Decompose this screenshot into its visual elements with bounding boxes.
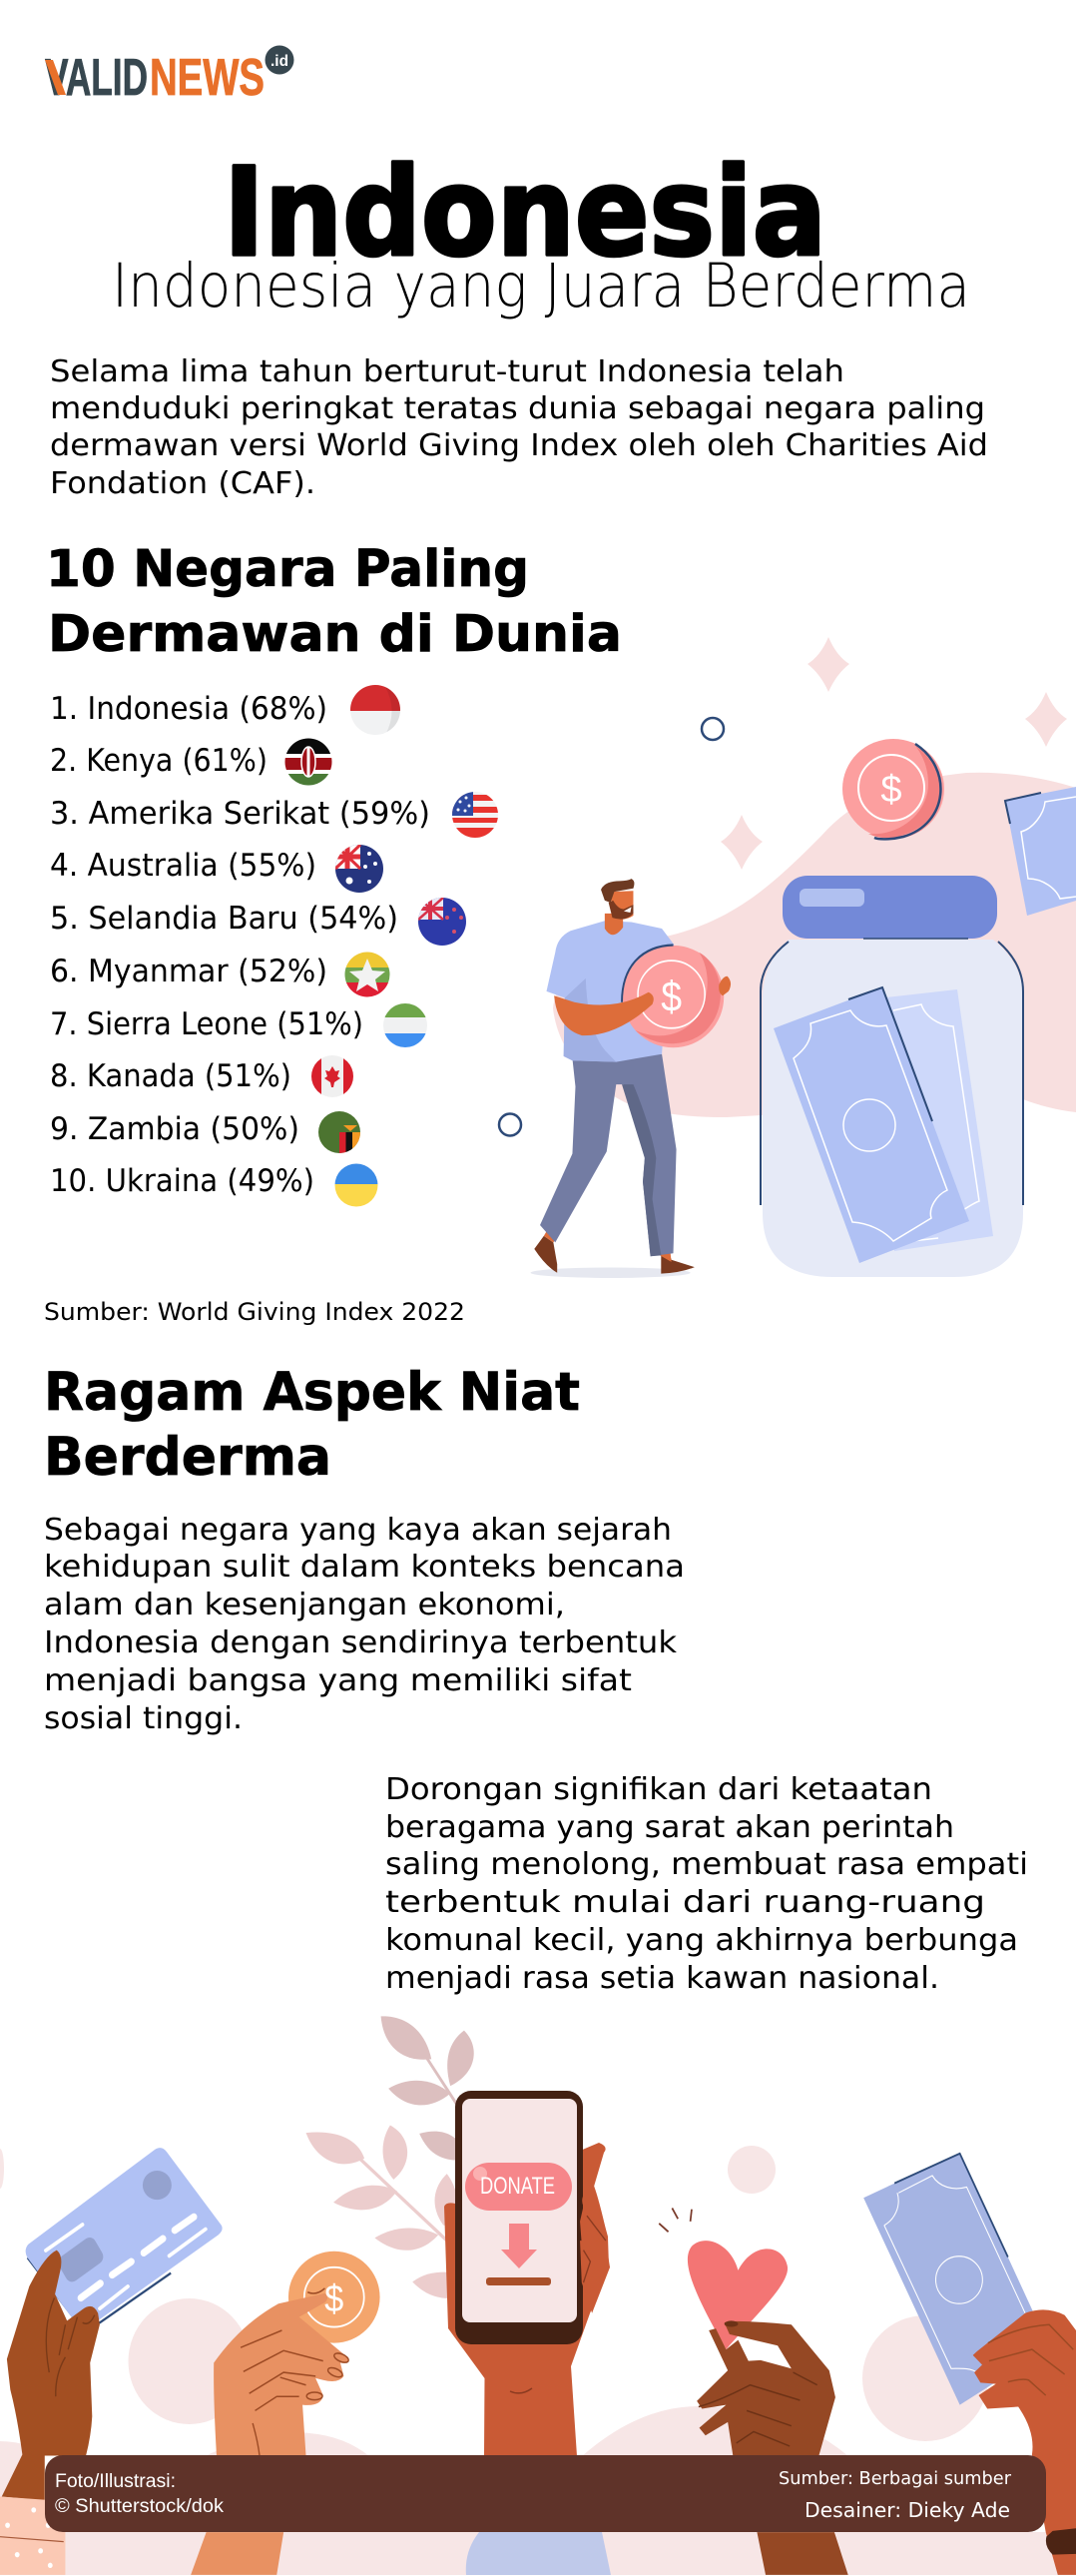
paragraph: right: beragama yang sarat akan perintah — [385, 1810, 954, 1845]
paragraph: right: komunal kecil, yang akhirnya berbunga — [385, 1923, 1018, 1958]
pink blob background — [553, 773, 1076, 1117]
country list: 2. Kenya (61%) — [50, 743, 268, 779]
pale background shapes — [0, 2146, 1076, 2575]
intro paragraph: Selama lima tahun berturut-turut Indonesia telah — [50, 354, 844, 389]
paragraph: right — [385, 1772, 1028, 1996]
donate button: DONATE — [480, 2173, 555, 2200]
flag: Zambia — [317, 1110, 361, 1154]
heading: 10 negara: Dermawan di Dunia — [48, 605, 622, 664]
country list: 1. Indonesia (68%) — [50, 691, 327, 727]
country list: 9. Zambia (50%) — [50, 1111, 299, 1147]
country list — [50, 691, 430, 1199]
leaves — [306, 2016, 474, 2298]
paragraph: right: terbentuk mulai dari ruang-ruang — [385, 1885, 985, 1920]
footer credits bar — [45, 2455, 1046, 2532]
man: $ — [661, 973, 682, 1020]
illustration: donating hands — [0, 2016, 1076, 2575]
dark hand holding card — [2, 2251, 100, 2500]
paragraph: left: alam dan kesenjangan ekonomi, — [44, 1588, 565, 1622]
paragraph: left: Sebagai negara yang kaya akan sejarah — [44, 1513, 672, 1548]
right bill — [1005, 787, 1076, 916]
logo: Validnews.id: NEWS — [150, 49, 265, 107]
orange coin — [288, 2252, 380, 2343]
subtitle: Indonesia yang Juara Berderma — [112, 251, 970, 322]
flag: Sierra Leone — [382, 1003, 428, 1048]
orange coin: $ — [324, 2276, 343, 2319]
flag: Kenya — [284, 738, 332, 786]
tan hand — [214, 2293, 347, 2456]
paragraph: left: Indonesia dengan sendirinya terbentuk — [44, 1625, 678, 1660]
donate button — [465, 2163, 572, 2211]
right hand with bill — [863, 2153, 1076, 2575]
logo: Validnews.id — [45, 46, 293, 107]
country list: 6. Myanmar (52%) — [50, 954, 327, 989]
sparkles and small circles — [721, 637, 1067, 870]
credit card — [26, 2148, 223, 2330]
flag: Ukraina — [334, 1163, 378, 1208]
sleeve — [0, 2496, 65, 2575]
flag: Kanada — [310, 1054, 354, 1098]
footer credits bar: © Shutterstock/dok — [55, 2496, 225, 2517]
country list: 10. Ukraina (49%) — [50, 1163, 314, 1199]
intro paragraph: Fondation (CAF). — [50, 466, 315, 501]
paragraph: left: sosial tinggi. — [44, 1701, 243, 1736]
title: Indonesia — [224, 142, 826, 284]
logo: Validnews.id: VALID — [45, 49, 148, 107]
paragraph: right: menjadi rasa setia kawan nasional. — [385, 1961, 939, 1996]
phone hand fingers — [580, 2186, 610, 2313]
country list: 8. Kanada (51%) — [50, 1058, 291, 1094]
country list: 4. Australia (55%) — [50, 848, 316, 884]
paragraph: left: kehidupan sulit dalam konteks bencana — [44, 1550, 685, 1585]
country list: 5. Selandia Baru (54%) — [50, 901, 398, 937]
flag: Australia — [334, 844, 384, 894]
heading: ragam aspek: Ragam Aspek Niat — [44, 1362, 580, 1423]
intro paragraph — [50, 354, 988, 501]
flag: Selandia Baru — [417, 897, 467, 947]
heading: ragam aspek: Berderma — [44, 1427, 331, 1488]
footer credits bar: Sumber: Berbagai sumber — [779, 2468, 1012, 2489]
source note: Sumber: World Giving Index 2022 — [44, 1298, 465, 1326]
phone — [455, 2091, 583, 2344]
intro paragraph: dermawan versi World Giving Index oleh oleh Charities Aid — [50, 428, 988, 463]
flag: Myanmar — [344, 952, 390, 998]
flag: Indonesia — [349, 685, 401, 737]
footer credits bar: Foto/Illustrasi: — [55, 2471, 176, 2492]
heading: ragam aspek — [44, 1362, 580, 1488]
country list: 7. Sierra Leone (51%) — [50, 1006, 363, 1042]
intro paragraph: menduduki peringkat teratas dunia sebagai negara paling — [50, 391, 985, 426]
illustration: man with coin and jar — [499, 637, 1076, 1278]
country list: 3. Amerika Serikat (59%) — [50, 796, 430, 832]
man — [530, 879, 731, 1278]
falling coin — [842, 739, 944, 839]
flag: Amerika Serikat — [452, 792, 498, 838]
jar — [761, 876, 1023, 1277]
paragraph: right: Dorongan signifikan dari ketaatan — [385, 1772, 932, 1807]
heading: 10 negara — [46, 540, 622, 664]
phone hand — [444, 2143, 611, 2575]
left hands: card and coin — [0, 2148, 380, 2575]
paragraph: left: menjadi bangsa yang memiliki sifat — [44, 1663, 632, 1698]
paragraph: left — [44, 1513, 685, 1736]
paragraph: right: saling menolong, membuat rasa empati — [385, 1847, 1028, 1882]
logo: Validnews.id: .id — [270, 53, 288, 70]
heading: 10 negara: 10 Negara Paling — [46, 540, 529, 599]
heart and hand — [659, 2209, 848, 2575]
download arrow — [501, 2224, 537, 2268]
falling coin: $ — [880, 769, 902, 811]
footer credits bar: Desainer: Dieky Ade — [805, 2498, 1010, 2522]
